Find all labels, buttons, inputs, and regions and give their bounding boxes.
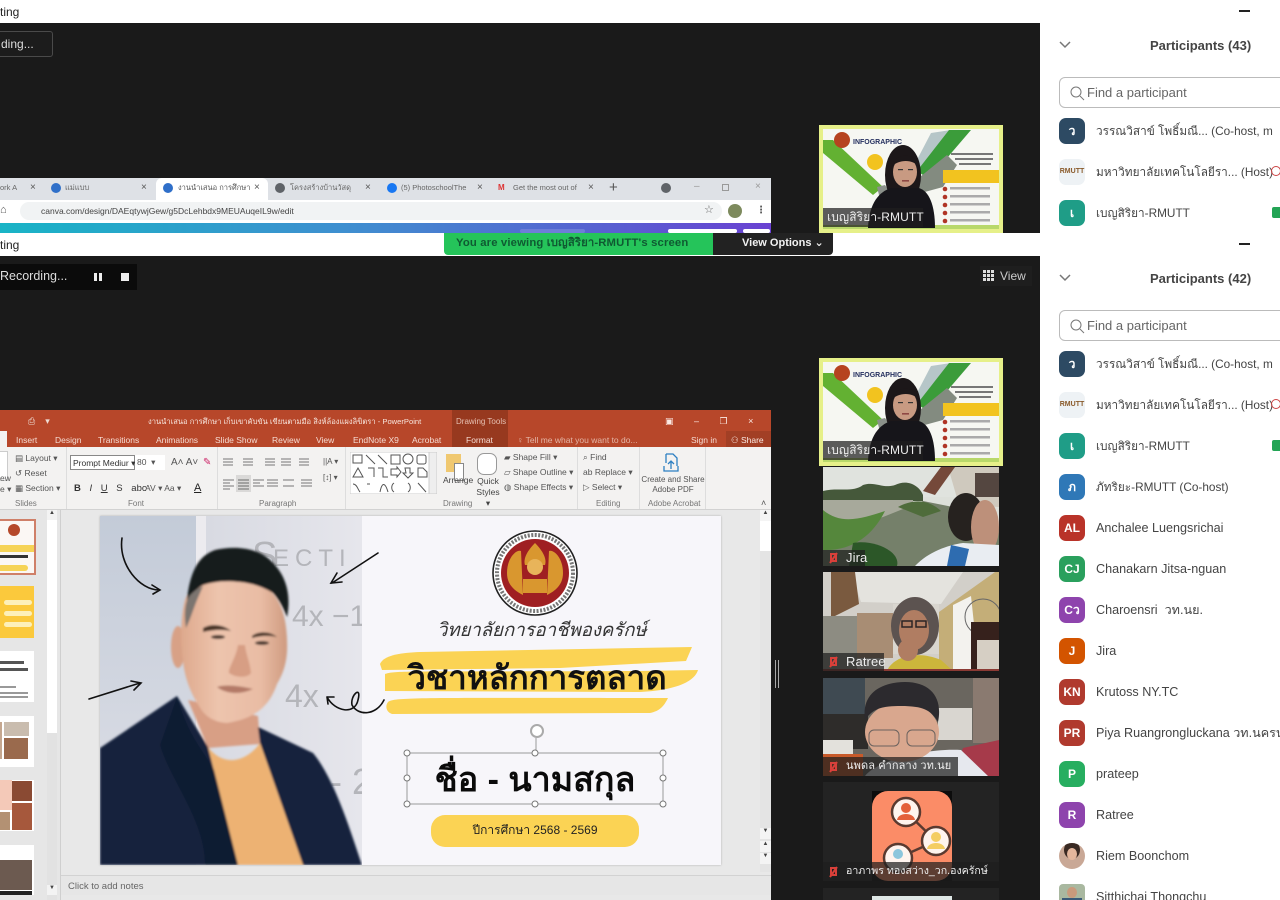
participant row: Krutoss NY.TC xyxy=(1096,685,1178,699)
notes bar: Click to add notes xyxy=(68,881,144,892)
slide canvas area xyxy=(60,510,771,900)
selected text box xyxy=(404,724,666,808)
thumbnail 6 xyxy=(0,845,34,895)
room scene with participant xyxy=(823,572,999,671)
video tile: third participant xyxy=(823,678,999,776)
browser window with canva tabs: × xyxy=(365,182,371,193)
slide photo: man at whiteboard xyxy=(100,516,362,865)
slides group: ▤ Layout ▾ xyxy=(15,453,58,463)
font group: 80 ▾ xyxy=(137,457,155,467)
video tile: next participant xyxy=(823,888,999,900)
participant row: วรรณวิสาข์ โพธิ์มณี... (Co-host, m xyxy=(1096,357,1273,371)
participant row host: มหาวิทยาลัยเทคโนโลยีรา... (Host) xyxy=(1096,398,1273,412)
text: Drawing xyxy=(443,499,472,508)
minimize icon xyxy=(1239,243,1250,244)
window controls: ▣ – ❐ × xyxy=(665,416,753,426)
slides group: e ▾ xyxy=(0,484,11,494)
participant row: Ratree xyxy=(1096,808,1134,822)
participant row: วรรณวิสาข์ โพธิ์มณี... (Co-host, m xyxy=(1096,124,1273,138)
top title strip xyxy=(0,0,1040,23)
paragraph group xyxy=(218,447,346,509)
powerpoint window xyxy=(0,410,771,900)
participant row host: RMUTT xyxy=(1060,168,1084,175)
slide xyxy=(100,516,721,865)
slide photo: man at whiteboard: ECTI xyxy=(273,545,352,572)
address bar: canva.com/design/DAEqtywjGew/g5DcLehbdx9MEUAuqeIL9w/edit xyxy=(41,206,294,216)
thumbnail scrollbar: ▼ xyxy=(49,885,55,891)
drawing group: ▰ Shape Fill ▾ xyxy=(504,452,557,462)
name label xyxy=(823,862,999,881)
participant row: KN xyxy=(1063,685,1081,699)
college logo seal xyxy=(492,530,578,616)
browser window with canva tabs: × xyxy=(141,182,147,193)
editing group: ab Replace ▾ xyxy=(583,467,633,477)
participant row xyxy=(1059,679,1178,705)
top title strip: ting xyxy=(0,5,19,19)
browser window with canva tabs: × xyxy=(477,182,483,193)
active browser tab xyxy=(156,178,268,200)
drawing tools tab xyxy=(452,410,508,447)
font group: B I U S abc xyxy=(74,483,147,494)
slides group: ↺ Reset xyxy=(15,468,47,478)
text: Adobe Acrobat xyxy=(648,499,700,508)
participant row: R xyxy=(1068,808,1076,822)
slide title: วิชาหลักการตลาด xyxy=(407,659,667,696)
participant row: Chanakarn Jitsa-nguan xyxy=(1096,562,1226,576)
collapse chevron xyxy=(1060,42,1070,48)
font group: Prompt Mediur ▾ xyxy=(73,458,135,468)
participant row host xyxy=(1059,392,1280,418)
address bar xyxy=(0,200,771,223)
ribbon group labels xyxy=(15,499,700,508)
drawing group xyxy=(346,447,578,509)
presenter name label: เบญสิริยา-RMUTT xyxy=(827,443,924,457)
browser window with canva tabs: M xyxy=(498,183,505,192)
editing group: ▷ Select ▾ xyxy=(583,482,622,492)
browser window with canva tabs: × xyxy=(755,181,761,192)
sign in: Sign in xyxy=(691,435,717,445)
participant row presenter: เ xyxy=(1070,439,1074,453)
view button xyxy=(980,266,1032,286)
slides group: ew xyxy=(0,473,11,483)
presenter name label top: เบญสิริยา-RMUTT xyxy=(827,210,924,224)
thumbnail 5 xyxy=(0,780,34,831)
participant row: ภัทริยะ-RMUTT (Co-host) xyxy=(1096,480,1229,494)
thumbnail scrollbar xyxy=(47,510,57,900)
view button: View xyxy=(1000,269,1026,283)
font group: A xyxy=(194,482,201,494)
drawing tools tab: Drawing Tools xyxy=(456,417,506,426)
slide photo: man at whiteboard: S xyxy=(252,535,277,577)
search box xyxy=(1059,77,1280,108)
collapse chevron xyxy=(1060,274,1070,281)
name label: นพดล คำกลาง วท.นย xyxy=(846,760,951,772)
name label: Ratree xyxy=(846,654,886,669)
font group: A˄ A˅ xyxy=(171,457,198,468)
recording status: Recording... xyxy=(0,269,67,283)
participant video: presenter top xyxy=(819,125,1003,233)
participant row xyxy=(1059,761,1139,787)
text: Font xyxy=(128,499,144,508)
search box: Find a participant xyxy=(1087,318,1187,333)
name placeholder: ชื่อ - นามสกุล xyxy=(435,761,635,799)
paragraph group: [↕] ▾ xyxy=(323,473,338,482)
browser window with canva tabs: Get the most out of xyxy=(513,183,577,192)
participant row xyxy=(1059,802,1134,828)
powerpoint tabs xyxy=(16,435,442,445)
right scrollbar: ▲ xyxy=(763,510,768,516)
video tile: avatar participant xyxy=(823,782,999,881)
name label: Jira xyxy=(846,550,867,565)
participant row: PR xyxy=(1064,726,1080,740)
thumbnail 2 xyxy=(0,586,34,638)
participant row: AL xyxy=(1064,521,1080,535)
participants heading: Participants (42) xyxy=(1150,271,1251,286)
active browser tab: งานนำเสนอ การศึกษา xyxy=(178,183,250,192)
right scrollbar xyxy=(760,510,771,872)
academic year pill: ปีการศึกษา 2568 - 2569 xyxy=(472,823,598,837)
participant row: Riem Boonchom xyxy=(1096,849,1189,863)
browser window with canva tabs: – xyxy=(694,181,700,192)
participants panel xyxy=(1040,233,1280,900)
recording status top: ding... xyxy=(1,37,34,51)
title bar xyxy=(0,410,771,447)
sign in and share xyxy=(726,431,771,447)
browser window with canva tabs: + xyxy=(609,179,618,196)
participant row xyxy=(1059,597,1203,623)
participant row presenter: เบญสิริยา-RMUTT xyxy=(1096,206,1190,220)
participant row xyxy=(1059,515,1223,541)
participant row: ภ xyxy=(1068,480,1076,494)
college name: วิทยาลัยการอาชีพองครักษ์ xyxy=(437,621,647,641)
search box xyxy=(1059,310,1280,341)
river scene with participant xyxy=(823,467,999,566)
browser window with canva tabs: ork A xyxy=(0,183,17,192)
name label xyxy=(823,653,884,671)
font group: AV ▾ Aa ▾ xyxy=(145,483,181,493)
ribbon collapse: ˄ xyxy=(761,498,766,508)
viewing banner xyxy=(444,233,713,255)
participant row: P xyxy=(1068,767,1076,781)
slide photo: man at whiteboard: 4x xyxy=(285,678,319,714)
browser window with canva tabs: × xyxy=(30,182,36,193)
text: Animations xyxy=(156,435,198,445)
sign in and share: ⚇ Share xyxy=(731,435,764,445)
minimize icon xyxy=(1239,10,1250,12)
home tab xyxy=(0,431,7,447)
participants heading: Participants (43) xyxy=(1150,38,1251,53)
canva gradient bar xyxy=(0,223,771,233)
drawing group: Arrange xyxy=(443,475,473,485)
editing group xyxy=(578,447,640,509)
text: EndNote X9 xyxy=(353,435,399,445)
participant row xyxy=(1059,351,1273,377)
participant row xyxy=(1059,720,1280,746)
video tile: Ratree xyxy=(823,572,999,671)
browser window with canva tabs: × xyxy=(588,182,594,193)
editing group: ⌕ Find xyxy=(583,452,607,462)
text: Acrobat xyxy=(412,435,441,445)
text: Insert xyxy=(16,435,37,445)
participant row presenter xyxy=(1059,433,1280,459)
text: Paragraph xyxy=(259,499,296,508)
hand-drawn arrows xyxy=(88,537,385,714)
right scrollbar: ▼ xyxy=(763,853,768,859)
participant row: Charoensri วท.นย. xyxy=(1096,603,1203,617)
address bar: ⋮ xyxy=(756,205,766,216)
font group xyxy=(67,447,218,509)
text: Review xyxy=(272,435,300,445)
participant row host: RMUTT xyxy=(1060,401,1084,408)
drawing tools tab: Format xyxy=(466,435,493,445)
tell me search: ♀ Tell me what you want to do... xyxy=(517,435,638,445)
participant row: ว xyxy=(1069,357,1075,371)
text: Transitions xyxy=(98,435,139,445)
participant row xyxy=(1059,556,1226,582)
participant row xyxy=(1059,118,1273,144)
thumbnail scrollbar: ▲ xyxy=(49,510,55,516)
notes bar xyxy=(61,875,771,895)
video tile: Jira xyxy=(823,467,999,566)
address bar: ⌂ xyxy=(0,204,7,216)
slide thumbnails pane xyxy=(0,510,60,900)
participant row xyxy=(1059,843,1189,869)
participant row: Cว xyxy=(1064,603,1080,617)
right scrollbar: ▲ xyxy=(763,841,768,847)
right scrollbar: ▼ xyxy=(763,828,768,834)
recording status top xyxy=(0,31,53,57)
adobe group xyxy=(640,447,706,509)
participant video: presenter top: INFOGRAPHIC xyxy=(853,139,902,146)
participant row xyxy=(1059,638,1116,664)
adobe group: Adobe PDF xyxy=(652,485,694,494)
name label xyxy=(823,757,958,776)
adobe group: Create and Share xyxy=(641,475,705,484)
network logo avatar xyxy=(872,791,952,881)
drawing group: ◍ Shape Effects ▾ xyxy=(504,482,573,492)
address bar: ☆ xyxy=(704,204,714,216)
text: Slides xyxy=(15,499,37,508)
recording status xyxy=(0,264,137,290)
browser window with canva tabs xyxy=(0,178,771,233)
participant row: prateep xyxy=(1096,767,1139,781)
browser window with canva tabs: แม่แบบ xyxy=(65,183,89,192)
quick access icons: ⎙ ▾ xyxy=(28,416,50,426)
name label: อาภาพร ทองสว่าง_วก.องครักษ์ xyxy=(846,865,988,877)
viewing banner: You are viewing เบญสิริยา-RMUTT's screen xyxy=(456,237,688,249)
yellow brush strokes xyxy=(380,647,698,714)
title strip second capture: ting xyxy=(0,238,19,252)
thumbnail 3 xyxy=(0,651,34,702)
participant row xyxy=(1059,474,1229,500)
name label xyxy=(823,550,865,566)
thumbnail 4 xyxy=(0,716,34,767)
participant row: ว xyxy=(1069,124,1075,138)
participant video: presenter xyxy=(819,358,1003,466)
thumbnail 1 xyxy=(0,519,36,575)
participant row presenter: เ xyxy=(1070,206,1074,220)
title strip second capture xyxy=(0,233,1040,256)
participant row: J xyxy=(1069,644,1075,658)
participant row host: มหาวิทยาลัยเทคโนโลยีรา... (Host) xyxy=(1096,165,1273,179)
participant row xyxy=(1059,884,1206,900)
participant row: CJ xyxy=(1064,562,1080,576)
panel splitter handle xyxy=(775,660,779,688)
participants panel top xyxy=(1040,0,1280,233)
participant row host xyxy=(1059,159,1280,185)
participant row presenter xyxy=(1059,200,1280,226)
paragraph group: ||A ▾ xyxy=(323,457,338,466)
text: Editing xyxy=(596,499,620,508)
participant row: Jira xyxy=(1096,644,1116,658)
view options button xyxy=(713,233,833,255)
participant row: Piya Ruangrongluckana วท.นครน xyxy=(1096,726,1280,740)
drawing group: ▱ Shape Outline ▾ xyxy=(504,467,573,477)
text: Slide Show xyxy=(215,435,258,445)
active browser tab: × xyxy=(254,182,260,193)
search box: Find a participant xyxy=(1087,85,1187,100)
participant row: Anchalee Luengsrichai xyxy=(1096,521,1223,535)
browser window with canva tabs: โครงสร้างบ้านวัสดุ xyxy=(290,183,351,192)
slides group: ▦ Section ▾ xyxy=(15,483,60,493)
document title: งานนำเสนอ การศึกษา เก็บเขาคับขัน เขียนตามมือ สิงห์ล้องแผงลิขิตรา - PowerPoint xyxy=(148,417,421,426)
font group: ✎ xyxy=(203,457,211,468)
slides group xyxy=(0,447,67,509)
text: Design xyxy=(55,435,81,445)
office scene with participant xyxy=(823,678,999,776)
ribbon xyxy=(0,447,771,510)
participant video: presenter: INFOGRAPHIC xyxy=(853,372,902,379)
participant row presenter: เบญสิริยา-RMUTT xyxy=(1096,439,1190,453)
text: View xyxy=(316,435,334,445)
drawing group: Quick Styles ▾ xyxy=(476,476,500,508)
academic year pill xyxy=(431,815,639,847)
view options button: View Options ⌄ xyxy=(742,237,824,249)
browser window with canva tabs: (5) PhotoschoolThe xyxy=(401,183,466,192)
